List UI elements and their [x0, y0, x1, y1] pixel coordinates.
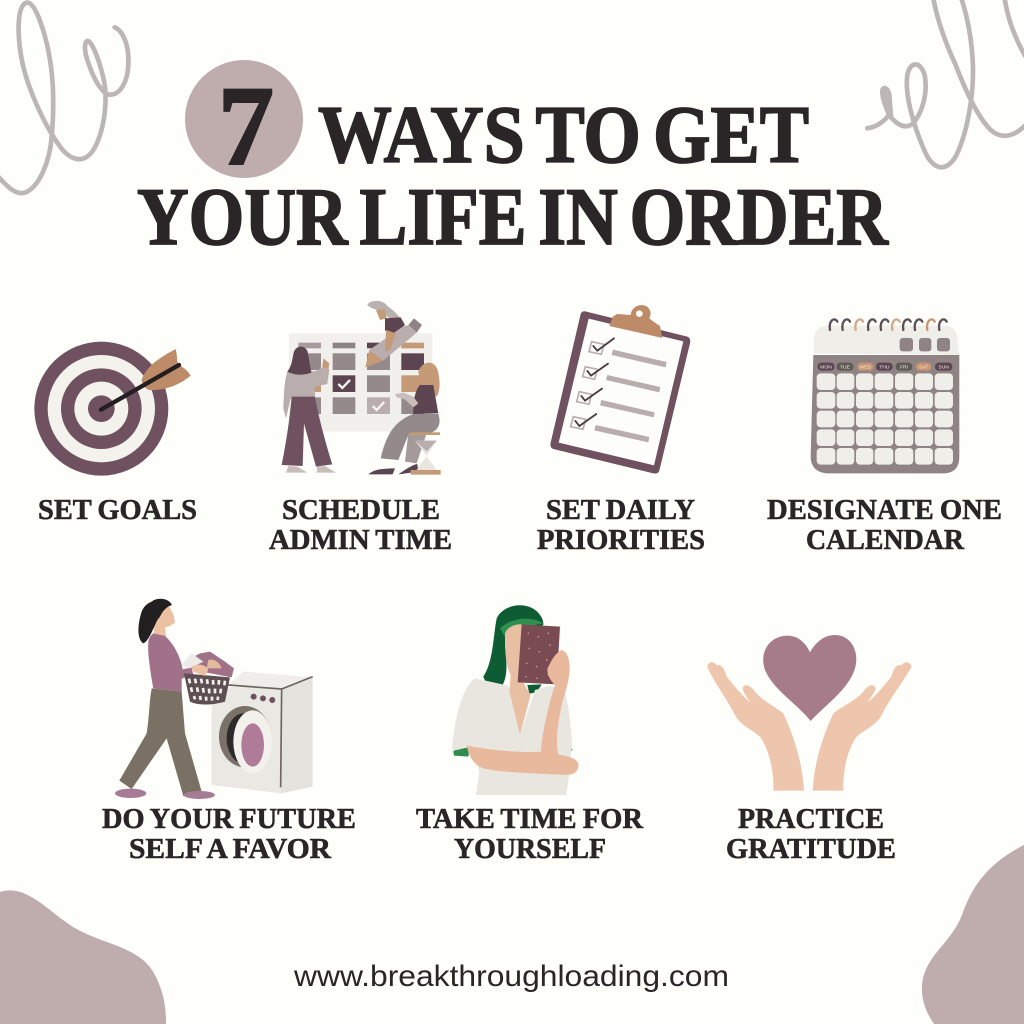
hair: [483, 605, 543, 687]
label: set daily priorities: PRIORITIES: [537, 524, 705, 556]
label: practice gratitude: PRACTICE: [738, 803, 884, 835]
shirt: [452, 678, 572, 795]
weekday labels: SAT: [919, 365, 928, 371]
label: set goals: SET GOALS: [38, 494, 197, 526]
weekday labels: WED: [860, 365, 872, 371]
weekday labels: FRI: [900, 365, 908, 371]
label: schedule admin time: [269, 494, 452, 556]
weekday labels: MON: [820, 365, 832, 371]
labels: row 1: [38, 494, 1002, 556]
website url: www.breakthroughloading.com: [293, 960, 729, 993]
label: do your future self a favor: SELF A FAVOR: [129, 833, 332, 865]
label: do your future self a favor: [102, 803, 356, 865]
title: [137, 60, 889, 262]
woman: [115, 599, 215, 799]
icon: woman doing laundry: [115, 599, 313, 799]
weekday labels: SUN: [938, 365, 949, 371]
label: practice gratitude: [726, 803, 896, 865]
weekday labels: THU: [879, 365, 890, 371]
weekday labels: [818, 363, 952, 371]
date cells: [817, 373, 953, 465]
schedule board: [289, 333, 432, 432]
face and neck: [505, 624, 531, 735]
number badge: [185, 60, 303, 189]
label: set daily priorities: SET DAILY: [546, 494, 695, 526]
sleeve accents: [453, 735, 573, 757]
decorative blob: bottom left: [0, 890, 166, 1024]
seated person: [368, 363, 441, 475]
decorative squiggle: top right: [867, 0, 1024, 167]
label: set daily priorities: [537, 494, 705, 556]
laundry basket: [182, 652, 234, 705]
icon: wall calendar: [811, 319, 959, 473]
label: designate one calendar: CALENDAR: [806, 524, 965, 556]
label: take time for yourself: YOURSELF: [454, 833, 606, 865]
icon: target with arrow: [34, 342, 191, 476]
icon: woman reading book: [452, 605, 578, 795]
label: designate one calendar: DESIGNATE ONE: [767, 494, 1002, 526]
label: do your future self a favor: DO YOUR FUTURE: [102, 803, 356, 835]
number badge: 7: [218, 64, 274, 189]
label: take time for yourself: TAKE TIME FOR: [416, 803, 644, 835]
label: take time for yourself: [416, 803, 644, 865]
person with hijab: [282, 347, 336, 473]
icon: schedule illustration: [282, 301, 441, 475]
icon: clipboard checklist: [550, 305, 690, 474]
calendar spirals: [830, 319, 947, 330]
decorative blob: bottom right: [922, 845, 1024, 1024]
labels: row 2: [102, 803, 896, 865]
person on pencil: [365, 301, 422, 367]
washing machine: [212, 672, 313, 793]
label: schedule admin time: ADMIN TIME: [269, 524, 452, 556]
arm and hand: [467, 650, 578, 775]
label: designate one calendar: [767, 494, 1002, 556]
icon: heart in hands: [707, 635, 912, 791]
weekday labels: TUE: [840, 365, 851, 371]
book: [518, 624, 560, 684]
title line 1: WAYS TO GET: [318, 89, 809, 180]
title line 2: YOUR LIFE IN ORDER: [137, 171, 889, 262]
label: schedule admin time: SCHEDULE: [282, 494, 440, 526]
label: practice gratitude: GRATITUDE: [726, 833, 896, 865]
decorative squiggle: top left: [0, 3, 128, 193]
